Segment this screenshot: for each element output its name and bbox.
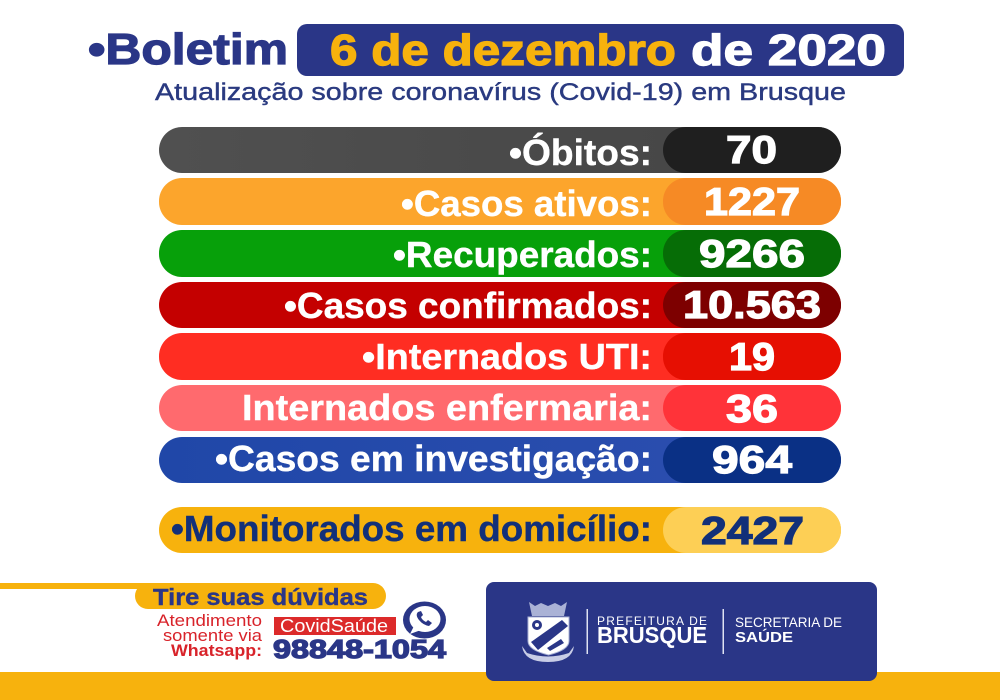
text: Atendimento somente via Whatsapp [157,611,263,660]
row: Óbitos: •Óbitos: [509,131,652,173]
text: Atendimento somente via Whatsapp: somente via [163,626,263,645]
text: Prefeitura de: PREFEITURA DE [597,614,707,628]
row: Casos em investigação [159,437,841,483]
title: Boletim: •Boletim [88,25,288,74]
row: Óbitos: 70 [726,129,777,172]
label: CovidSaúde: CovidSaúde [280,616,388,636]
divider lines [586,609,588,654]
row: Internados UTI [159,333,841,380]
row: Internados enfermaria: Internados enfermaria: [242,387,652,428]
row: Recuperados [159,230,841,277]
row: Recuperados: 9266 [699,233,805,276]
row: Internados enfermaria [159,385,841,431]
icon: whatsapp [403,602,446,638]
row: Internados UTI: 19 [729,336,775,379]
text: Saúde: SAÚDE [735,628,793,646]
row: Casos ativos: •Casos ativos: [401,183,652,224]
panel: Prefeitura de Brusque logo [486,582,877,681]
text: Atendimento somente via Whatsapp: Atendimento [157,611,262,630]
row: Monitorados em domicílio: 2427 [701,510,804,553]
row: Óbitos [159,127,841,173]
row: Internados enfermaria: 36 [726,388,778,431]
text: Brusque: BRUSQUE [597,622,707,648]
row: Casos em investigação: 964 [712,439,792,482]
row: Casos confirmados: 10.563 [683,284,821,327]
title date banner: 6 de dezembro [330,26,676,75]
row: Casos em investigação: •Casos em investigação: [215,438,652,479]
row: Recuperados: •Recuperados: [393,234,652,275]
text: Secretaria de: SECRETARIA DE [735,614,842,630]
row: Casos confirmados [159,282,841,328]
row: Internados UTI: •Internados UTI: [362,336,652,377]
row: Monitorados em domicílio: •Monitorados em domicílio: [171,508,652,549]
row: Casos ativos: 1227 [704,181,800,224]
footer: Tire suas dúvidas tab [0,583,386,610]
row: Monitorados em domicílio [159,507,841,553]
phone number: 98848-1054 [273,634,447,664]
subtitle: Atualização sobre coronavírus (Covid-19) em Brusque [155,79,846,106]
text: Atendimento somente via Whatsapp: Whatsapp: [171,641,262,660]
row: Casos confirmados: •Casos confirmados: [284,285,652,326]
title date banner [297,24,904,76]
footer: Tire suas dúvidas tab: Tire suas dúvidas [153,584,368,610]
icon: city crest [522,602,574,662]
row: Casos ativos [159,178,841,225]
footer yellow band [0,672,1000,700]
title date banner: de 2020 [691,26,886,75]
